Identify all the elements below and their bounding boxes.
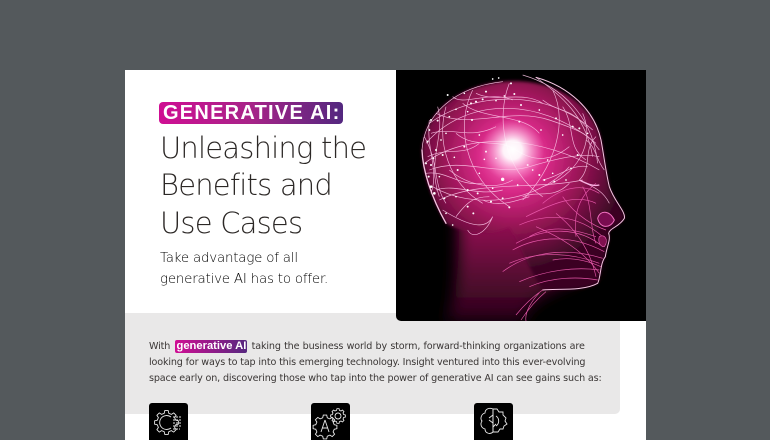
central light burst (481, 118, 544, 182)
head fill (422, 81, 624, 290)
intro paragraph: space early on, discovering those who tap into the power of generative AI can see gains such as: (149, 373, 602, 384)
intro paragraph: generative AI (176, 340, 246, 352)
title line 3: Use Cases (160, 206, 302, 240)
subtitle: Take advantage of all (160, 251, 298, 266)
head outline (422, 77, 624, 290)
subtitle: generative AI has to offer. (160, 272, 328, 286)
image: glowing neural head (396, 70, 646, 321)
icon: gears with compass (311, 403, 350, 440)
white card (125, 70, 646, 440)
light nodes (425, 77, 588, 226)
icon: brain and gear (474, 403, 513, 440)
intro paragraph (149, 340, 602, 384)
icon: gear with data lines (149, 403, 188, 440)
intro paragraph: With taking the business world by storm, forward-thinking organizations are (149, 341, 585, 352)
title line 1: Unleashing the (160, 131, 366, 165)
neck glow (446, 203, 596, 321)
intro paragraph: looking for ways to tap into this emerging technology. Insight ventured into this ever-evolving (149, 357, 585, 368)
subtitle (160, 251, 328, 286)
title line 2: Benefits and (160, 168, 332, 202)
nose detail (579, 180, 614, 247)
neural strands (424, 75, 609, 235)
face strands (503, 183, 606, 321)
grey intro panel (125, 313, 620, 414)
badge: Generative AI: GENERATIVE AI: (163, 102, 341, 124)
